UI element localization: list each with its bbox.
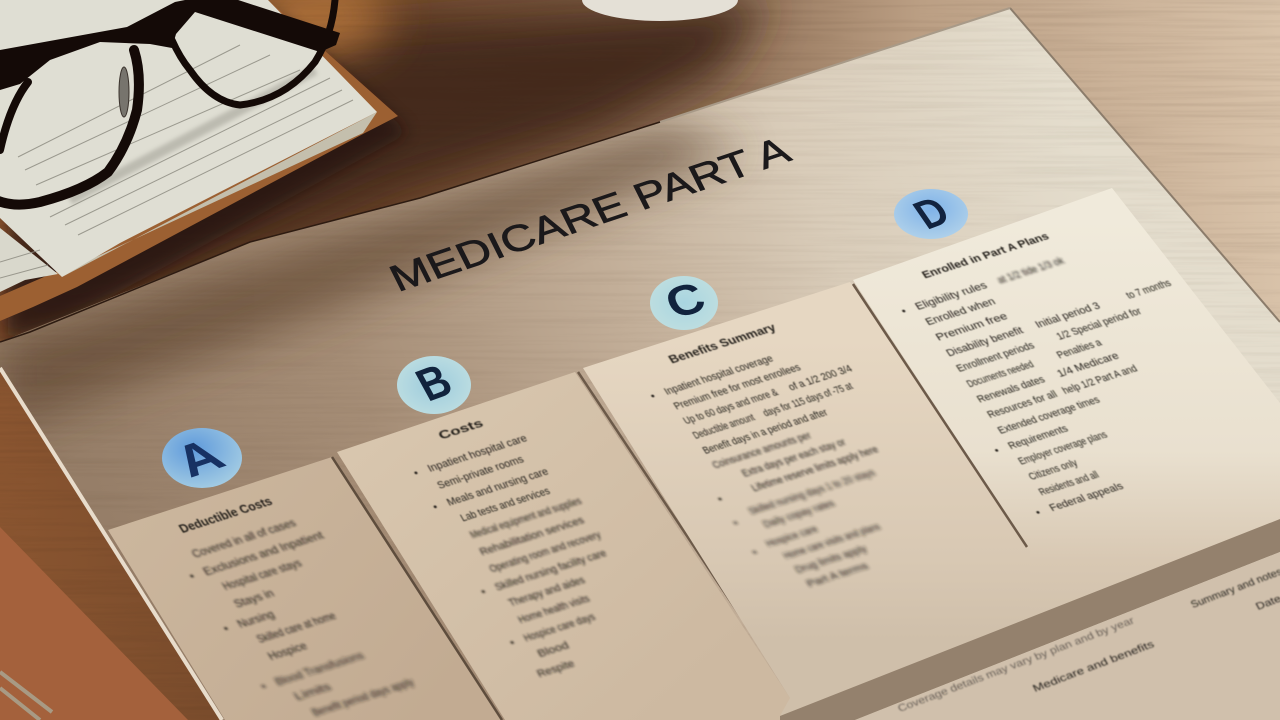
- column C text: Part A terms: [804, 560, 871, 590]
- column C text: Premium free for most enrollees: [672, 362, 803, 412]
- column B text: Inpatient hospital care: [425, 433, 530, 475]
- column A text: Deductible Costs: [177, 495, 276, 536]
- open notebook: [0, 0, 406, 339]
- column D text: •: [899, 306, 909, 317]
- column A text: [160, 487, 422, 720]
- badge A: A: [164, 430, 235, 487]
- column B text: Lab tests and services: [458, 485, 553, 524]
- column D text: Citizens only: [1026, 457, 1081, 483]
- column A text: Hospital care stays: [221, 558, 305, 593]
- column A text: Covered in all of cases: [190, 517, 299, 561]
- column D text: Renewals dates: [975, 374, 1048, 405]
- column C text: •: [731, 518, 741, 529]
- column B text: •: [508, 637, 517, 649]
- column B text: Medical equipment and supplies: [468, 495, 584, 541]
- column A text: Nursing: [235, 609, 277, 631]
- column C text: Inpatient hospital coverage: [662, 353, 776, 398]
- column B text: Blood: [535, 640, 571, 660]
- column D text: Requirements: [1006, 423, 1071, 452]
- column B text: Home health visits: [516, 593, 593, 626]
- column D text: Employer coverage plans: [1016, 429, 1110, 467]
- column C text: Drug limits apply: [793, 543, 870, 576]
- column D text: Federal appeals: [1047, 481, 1126, 514]
- column D text: Residents and all: [1037, 470, 1102, 498]
- panel: column B: [337, 372, 792, 720]
- column D text: Enrolled in Part A Plans: [920, 231, 1051, 281]
- column D text: Enrolled when: [923, 296, 998, 328]
- glasses shadow on page: [70, 70, 315, 200]
- column C text: •: [648, 391, 658, 402]
- column D text: to 7 months: [1124, 277, 1174, 301]
- column D text: Premium free: [934, 311, 1010, 343]
- column D text: Disability benefit: [944, 325, 1026, 359]
- column D text: Documents needed: [965, 359, 1036, 390]
- panel: column C: [583, 282, 1030, 716]
- title: MEDICARE PART A: [383, 130, 798, 300]
- footer text: Coverage details may vary by plan and by year: [896, 616, 1137, 715]
- badge C: C: [658, 272, 712, 328]
- column B text: Meals and nursing care: [445, 466, 551, 509]
- column B text: Rehabilitation services: [478, 514, 587, 558]
- column B text: •: [479, 586, 489, 598]
- column D text: •: [1033, 507, 1044, 518]
- column C text: Benefit days in a period and after: [700, 407, 830, 456]
- column B text: Skilled nursing facility care: [493, 548, 609, 594]
- column B text: [398, 403, 661, 683]
- column D text: 1/4 Medicare: [1055, 350, 1122, 380]
- column B text: •: [411, 467, 421, 479]
- column D text: Resources for all: [985, 389, 1060, 421]
- column C text: Lifetime reserve limits apply here: [749, 444, 881, 494]
- coffee cup base: [582, 0, 738, 21]
- column D text: Enrollment periods: [954, 340, 1037, 374]
- column B text: Costs: [437, 418, 486, 442]
- eyeglasses: [0, 0, 340, 205]
- badge D: D: [905, 188, 958, 238]
- paperclip: [0, 672, 52, 720]
- column C text: of a 1/2 200 3/4: [786, 363, 855, 393]
- column C text: Up to 60 days and more &: [681, 387, 781, 427]
- column D text: at 1/2 tide 1/3 ok: [995, 255, 1067, 286]
- column B text: Hospice care days: [522, 611, 598, 644]
- column C text: Skilled nursing days 1 to 20 stays: [746, 467, 878, 517]
- column D text: Eligibility rules: [913, 280, 990, 313]
- panel: column A: [108, 457, 502, 720]
- column A text: •: [259, 681, 269, 693]
- column C text: [632, 309, 964, 599]
- column C text: Hospice care: [764, 523, 820, 550]
- column B text: Respite: [535, 658, 577, 680]
- column C text: Benefits Summary: [667, 322, 779, 366]
- column A text: Limits: [292, 681, 334, 703]
- column D text: help 1/2 Part A and: [1060, 363, 1140, 397]
- column B text: Semi-private rooms: [435, 454, 527, 492]
- brown leather folder: [0, 527, 188, 720]
- column D text: •: [992, 445, 1002, 456]
- column D text: Extended coverage times: [995, 394, 1102, 436]
- column C text: Daily copay rates: [761, 498, 837, 531]
- column D text: Initial period 3: [1033, 300, 1103, 330]
- column A text: Benefit period days apply: [310, 676, 417, 719]
- footer text: Date: [1254, 594, 1280, 613]
- footer text: [896, 567, 1280, 715]
- column A text: Skilled care at home: [255, 610, 339, 646]
- column D text: 1/2 Special period for: [1054, 306, 1144, 342]
- column A text: Stays in: [232, 588, 277, 611]
- column C text: Coinsurance amounts per: [710, 430, 814, 471]
- notebook ruled lines: [0, 45, 353, 278]
- column C text: days for 115 days of -75 at: [761, 381, 855, 419]
- column A text: •: [187, 571, 198, 583]
- column C text: Home care visits and plans: [781, 521, 883, 562]
- lower strip and footer panel: [780, 519, 1280, 720]
- column D text: Penalties a: [1055, 337, 1104, 361]
- badge B: [397, 355, 471, 414]
- nose pad: [119, 67, 129, 117]
- column A text: Exclusions and Inpatient: [201, 529, 327, 578]
- column A text: Hospice: [266, 641, 310, 663]
- column B text: •: [431, 501, 440, 513]
- panel: column D: [853, 188, 1280, 618]
- column D text: [883, 207, 1277, 518]
- column C text: Extra days per each stay or: [740, 436, 849, 479]
- column C text: •: [750, 547, 760, 558]
- column A text: •: [221, 623, 232, 635]
- column C text: •: [715, 494, 726, 505]
- badge B: B: [408, 355, 461, 411]
- column C text: Deductible amount: [691, 412, 757, 442]
- column A text: Blood Transfusions: [273, 650, 367, 689]
- column B text: Operating room and recovery: [487, 529, 604, 575]
- column B text: Therapy and aides: [506, 574, 588, 609]
- footer text: Medicare and benefits: [1031, 640, 1156, 695]
